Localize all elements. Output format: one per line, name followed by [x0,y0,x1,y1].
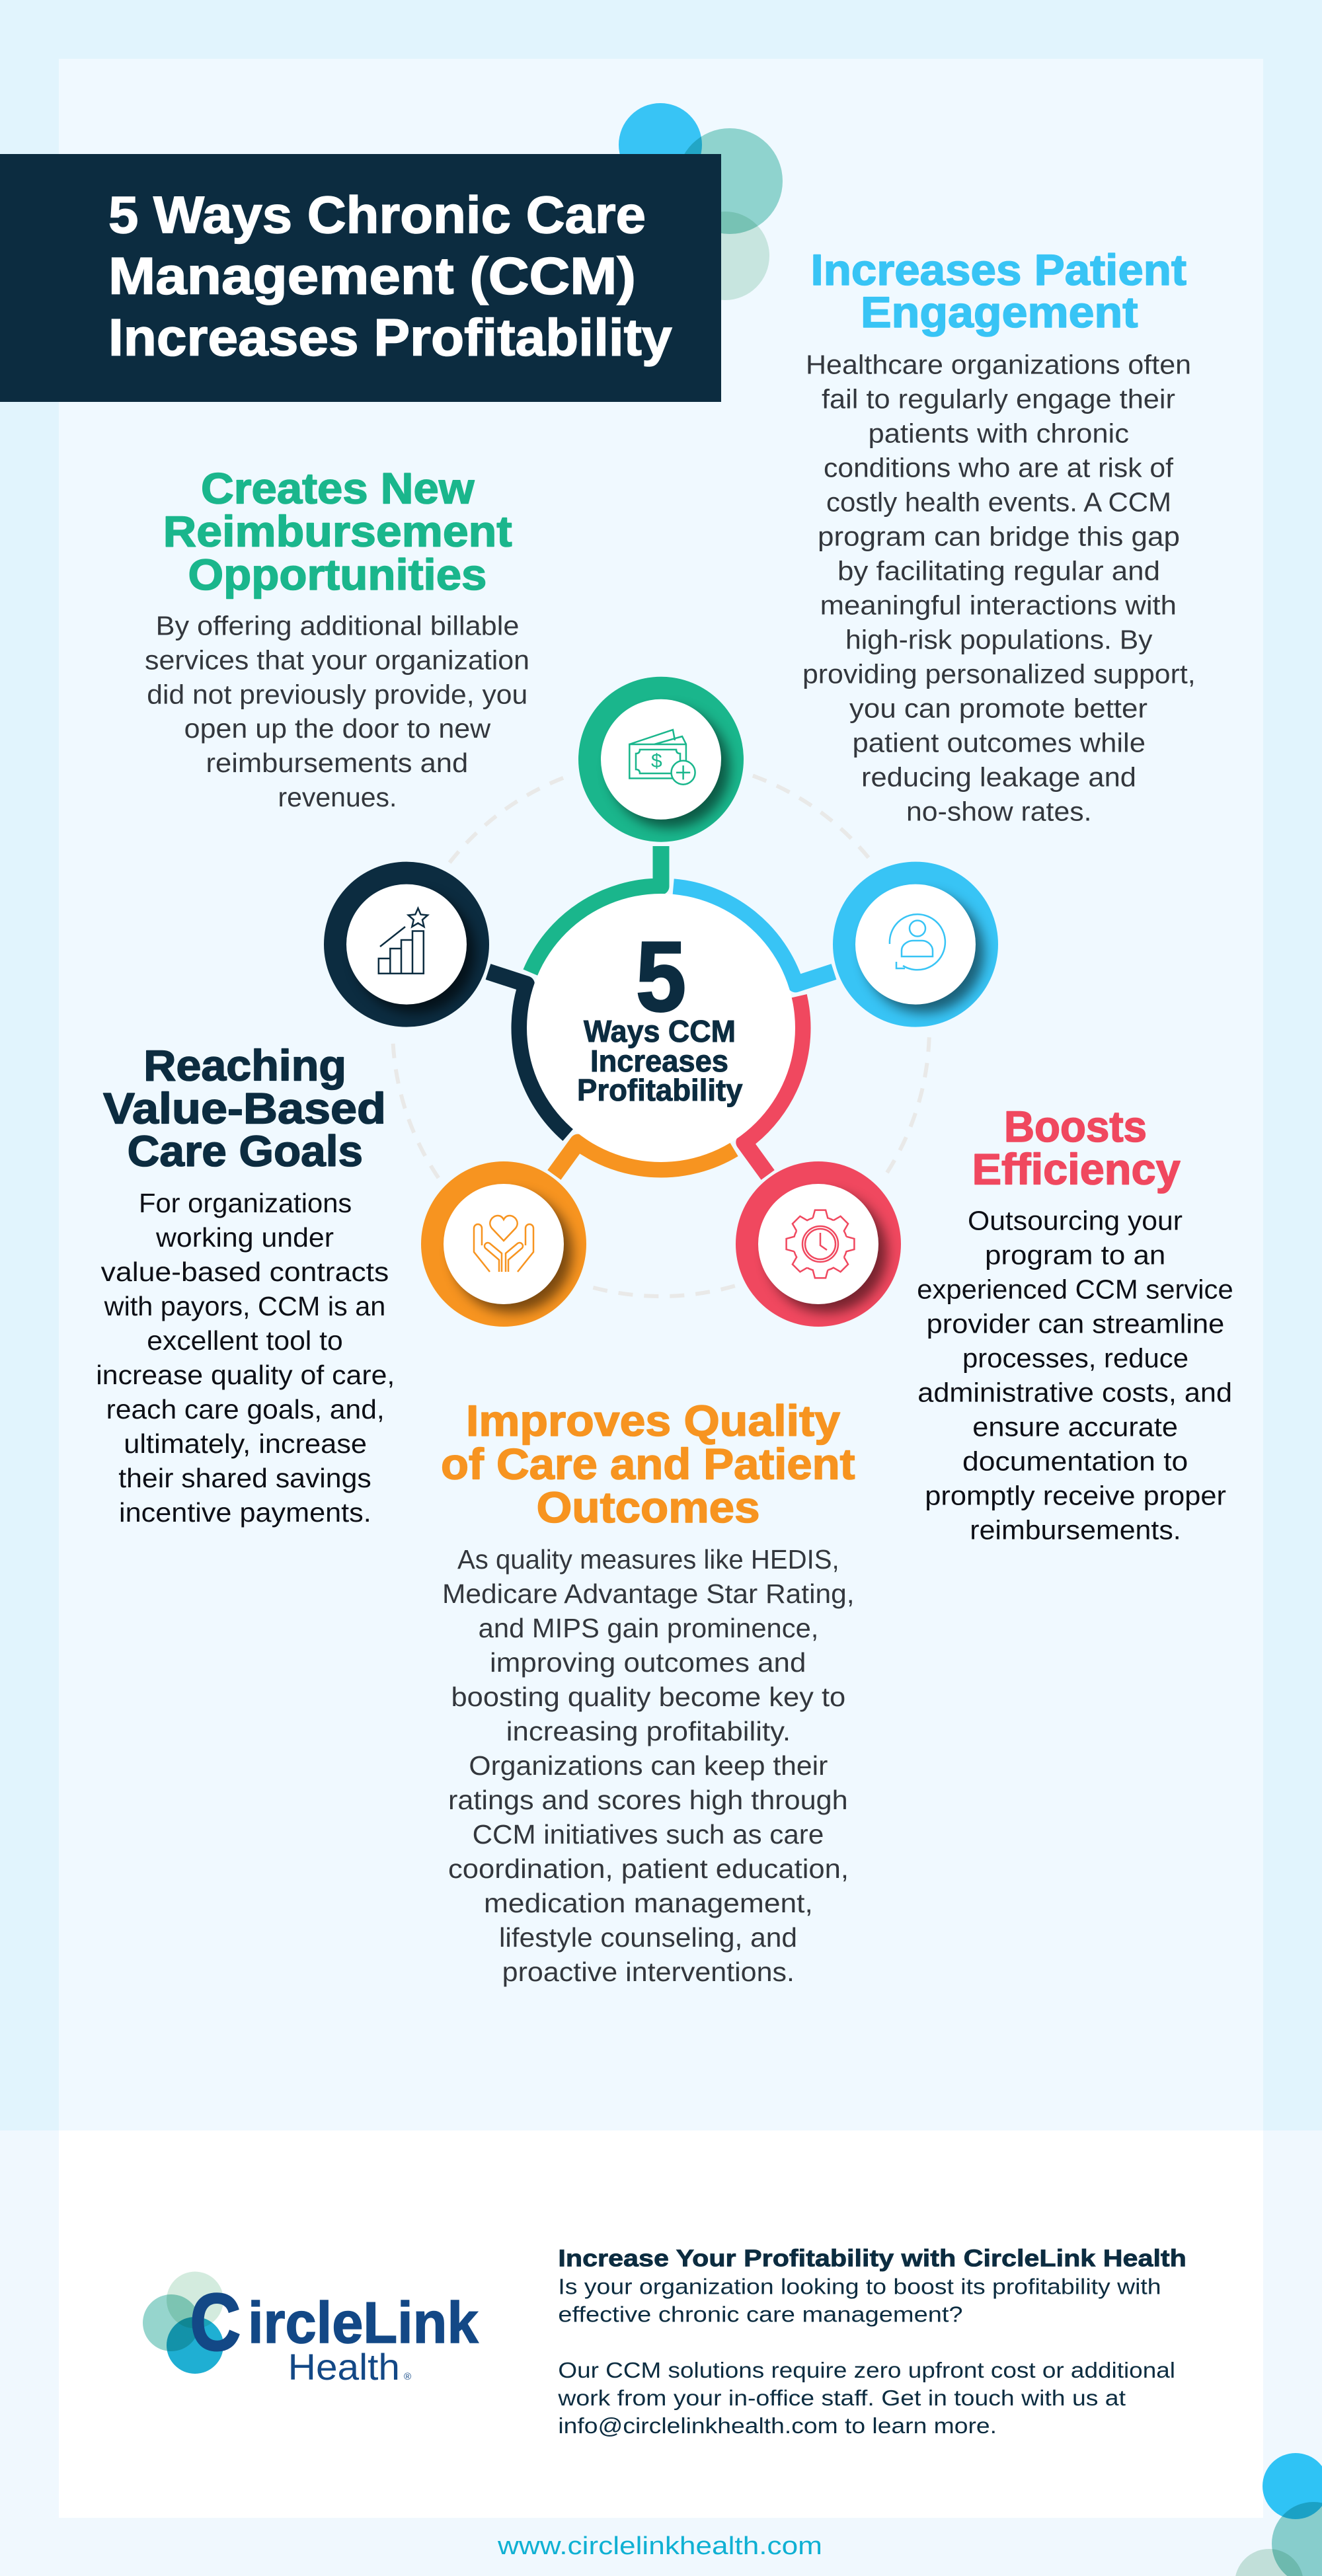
logo: CircleLink Health [143,2271,479,2388]
text block: Boosts Efficiency: promptly receive proper [925,1481,1226,1511]
text block: footer call to action [557,2245,1186,2438]
diagram: central disc with title: Ways CCM [584,1014,736,1048]
title banner: Management (CCM) [108,247,636,305]
text block: Increases Patient Engagement: meaningful interactions with [820,590,1177,620]
text block: Reaching Value-Based Care Goals: For organizations [139,1188,352,1218]
text block: Boosts Efficiency: Boosts [1004,1102,1147,1151]
text block: Reaching Value-Based Care Goals: their shared savings [118,1463,371,1493]
text block: Increases Patient Engagement: fail to regularly engage their [822,383,1175,414]
text block: Increases Patient Engagement: you can promote better [849,693,1147,723]
text block: Improves Quality of Care and Patient Outcomes: and MIPS gain prominence, [479,1613,818,1643]
logo: CircleLink Health: ® [404,2371,411,2382]
text block: Increases Patient Engagement: providing personalized support, [802,658,1196,689]
website url: www.circlelinkhealth.com [497,2532,822,2560]
text block: Creates New Reimbursement Opportunities: reimbursements and [206,748,468,778]
text block: Creates New Reimbursement Opportunities: Opportunities [188,550,486,599]
text block: Boosts Efficiency: program to an [985,1240,1165,1270]
text block: Increases Patient Engagement [802,245,1196,826]
text block: Improves Quality of Care and Patient Outcomes: proactive interventions. [502,1957,795,1987]
text block: Reaching Value-Based Care Goals: working under [155,1222,334,1253]
text block: Reaching Value-Based Care Goals: Care Goals [128,1126,363,1175]
text block: Boosts Efficiency [917,1102,1233,1545]
text block: Improves Quality of Care and Patient Outcomes: increasing profitability. [506,1716,791,1746]
decorative circles: bottom right [1235,2453,1322,2576]
logo: CircleLink Health: C [190,2277,241,2367]
text block: Boosts Efficiency: Outsourcing your [968,1206,1183,1236]
text block: Increases Patient Engagement: Engagement [861,288,1138,336]
text block: Creates New Reimbursement Opportunities: By offering additional billable [156,611,519,641]
text block: Creates New Reimbursement Opportunities: Reimbursement [163,506,512,555]
text block: Boosts Efficiency: processes, reduce [962,1343,1188,1374]
text block: Improves Quality of Care and Patient Outcomes: Outcomes [537,1483,760,1532]
text block: Creates New Reimbursement Opportunities: open up the door to new [184,713,491,744]
text block: Increases Patient Engagement: high-risk populations. By [845,624,1153,654]
node: orange quality circle with hands and heart icon [421,1161,586,1327]
text block: footer call to action: Is your organization looking to boost its profitability with [558,2275,1161,2299]
text block: Improves Quality of Care and Patient Outcomes: medication management, [484,1888,813,1918]
text block: footer call to action: work from your in-office staff. Get in touch with us at [557,2386,1126,2410]
text block: Increases Patient Engagement: costly health events. A CCM [826,487,1171,517]
text block: Reaching Value-Based Care Goals: with payors, CCM is an [104,1291,385,1321]
panel: white footer band [59,2130,1263,2518]
text block: Creates New Reimbursement Opportunities [145,463,529,812]
logo: CircleLink Health: Health [288,2346,400,2388]
text block: Boosts Efficiency: ensure accurate [972,1412,1178,1442]
text block: footer call to action: effective chronic care management? [558,2302,963,2327]
title banner: 5 Ways Chronic Care [108,185,646,244]
text block: Boosts Efficiency: administrative costs, and [917,1378,1232,1408]
diagram: central disc with title [527,894,795,1162]
node: blue engagement circle with person icon [833,862,998,1027]
text block: Improves Quality of Care and Patient Outcomes: of Care and Patient [441,1440,855,1489]
text block: Boosts Efficiency: Efficiency [972,1145,1181,1194]
text block: Creates New Reimbursement Opportunities: revenues. [278,782,397,812]
text block: Reaching Value-Based Care Goals: excellent tool to [147,1325,343,1356]
text block: Reaching Value-Based Care Goals: reach care goals, and, [106,1394,385,1425]
text block: Increases Patient Engagement: reducing leakage and [861,761,1136,792]
text block: Improves Quality of Care and Patient Outcomes: lifestyle counseling, and [499,1922,797,1953]
text block: Improves Quality of Care and Patient Outcomes: coordination, patient education, [448,1854,849,1884]
title banner: Increases Profitability [108,308,672,366]
text block: Reaching Value-Based Care Goals: Reaching [143,1041,346,1090]
text block: Improves Quality of Care and Patient Outcomes: As quality measures like HEDIS, [457,1544,839,1575]
node: green reimbursement circle with money icon [578,677,744,842]
logo: CircleLink Health: ircleLink [248,2290,479,2355]
diagram: central disc with title: Increases [590,1044,728,1078]
text block: Creates New Reimbursement Opportunities: services that your organization [145,645,529,676]
node: green reimbursement circle with money icon: $ [651,750,662,772]
node: red efficiency circle with gear clock icon [736,1161,901,1327]
text block: footer call to action: Increase Your Profitability with CircleLink Health [558,2245,1186,2272]
text block: Improves Quality of Care and Patient Outcomes: Improves Quality [466,1396,840,1445]
text block: Increases Patient Engagement: no-show rates. [906,796,1092,826]
text block: Increases Patient Engagement: patients with chronic [869,418,1129,448]
text block: Reaching Value-Based Care Goals: ultimately, increase [124,1428,367,1459]
diagram: central disc with title: Profitability [577,1073,743,1107]
text block: Reaching Value-Based Care Goals: increase quality of care, [96,1360,395,1390]
text block: Increases Patient Engagement: patient outcomes while [853,727,1146,758]
text block: Creates New Reimbursement Opportunities: Creates New [201,463,475,512]
text block: Reaching Value-Based Care Goals: value-based contracts [101,1257,389,1287]
text block: Improves Quality of Care and Patient Outcomes: CCM initiatives such as care [473,1819,824,1850]
text block: Creates New Reimbursement Opportunities: did not previously provide, you [147,679,527,709]
node: dark value-based circle with chart icon [324,862,489,1027]
title banner [0,154,721,402]
text block: Boosts Efficiency: documentation to [962,1446,1188,1477]
text block: Boosts Efficiency: reimbursements. [970,1515,1181,1545]
text block: Increases Patient Engagement: by facilitating regular and [837,555,1160,586]
text block: Increases Patient Engagement: conditions who are at risk of [824,452,1174,483]
text block: Boosts Efficiency: experienced CCM service [917,1274,1233,1305]
text block: Reaching Value-Based Care Goals: Value-Based [103,1083,386,1132]
text block: Improves Quality of Care and Patient Outcomes: improving outcomes and [490,1647,806,1678]
text block: Improves Quality of Care and Patient Outcomes: Organizations can keep their [469,1750,828,1781]
text block: Improves Quality of Care and Patient Outcomes: boosting quality become key to [451,1682,845,1712]
text block: Improves Quality of Care and Patient Outcomes: Medicare Advantage Star Rating, [442,1579,855,1609]
decorative circles: top [619,103,783,300]
text block: footer call to action: info@circlelinkhealth.com to learn more. [558,2413,997,2438]
text block: Increases Patient Engagement: Increases Patient [810,245,1186,294]
text block: Improves Quality of Care and Patient Outcomes: ratings and scores high through [448,1785,848,1815]
text block: footer call to action: Our CCM solutions require zero upfront cost or additional [558,2358,1175,2382]
text block: Reaching Value-Based Care Goals [96,1041,395,1528]
text block: Increases Patient Engagement: Healthcare organizations often [806,349,1191,379]
text block: Boosts Efficiency: provider can streamline [927,1309,1224,1339]
diagram: dashed orbit arcs [342,749,966,1356]
text block: Increases Patient Engagement: program can bridge this gap [818,521,1180,551]
text block: Reaching Value-Based Care Goals: incentive payments. [119,1497,371,1528]
diagram: coloured ring segments with spokes [448,846,873,1251]
diagram: central disc with title: 5 [636,921,686,1032]
text block: Improves Quality of Care and Patient Outcomes [441,1396,855,1987]
panel: inner content area [59,59,1263,2130]
